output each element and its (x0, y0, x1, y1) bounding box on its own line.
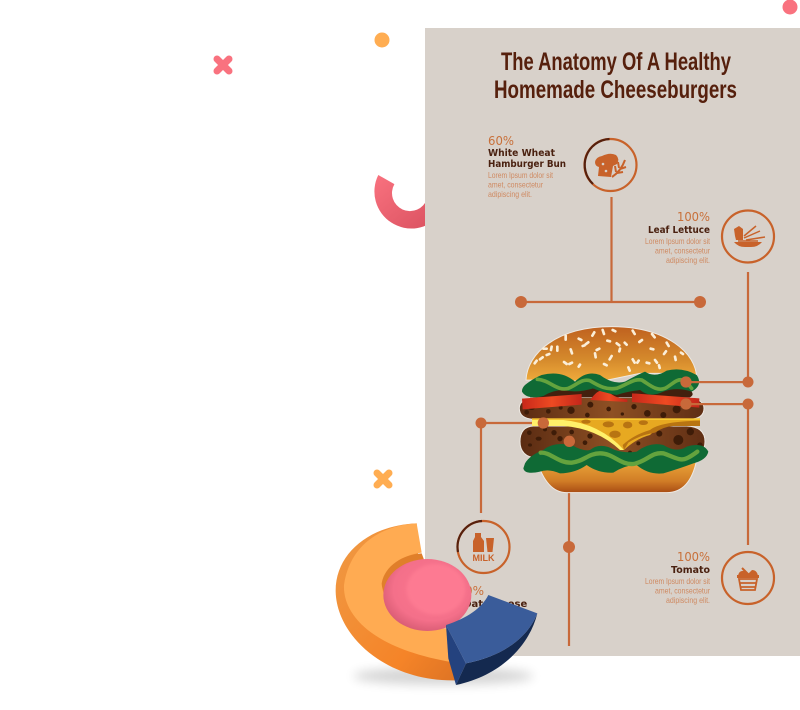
blue bottom side (456, 613, 537, 685)
lower lettuce (523, 444, 708, 474)
text: tomato: amet, consectetur (655, 586, 710, 596)
top bun (526, 327, 697, 382)
lower patty spots (527, 427, 703, 455)
text: tomato: adipiscing elit. (666, 595, 710, 605)
text: leaf lettuce (645, 210, 710, 265)
sesame seeds (535, 330, 683, 371)
blue left side (446, 625, 466, 685)
top dark layer (530, 388, 693, 397)
orange dot decoration (374, 32, 390, 48)
pink ring segment (374, 175, 440, 229)
text: white wheat bun: White Wheat (488, 148, 555, 159)
burger connector dots (538, 376, 748, 447)
icon: basket (722, 552, 774, 604)
orange segment top (344, 523, 459, 663)
orange inner wall (381, 553, 427, 600)
text: white wheat bun: adipiscing elit. (488, 189, 532, 199)
lower patty (520, 426, 705, 458)
blue top (446, 595, 537, 663)
icon: milk (458, 521, 510, 573)
icon: salad bowl (722, 210, 774, 262)
text: white wheat bun: Hamburger Bun (488, 159, 566, 170)
cheese (532, 418, 700, 450)
text: partly hidden ingredient: Oat Cheese (463, 599, 527, 610)
connector lines (476, 197, 754, 646)
icon: milk: MILK (472, 553, 495, 563)
3D donut chart (336, 523, 537, 685)
text: partly hidden ingredient: 60% (457, 584, 484, 598)
text: tomato: 100% (677, 550, 710, 564)
pink dome (383, 559, 471, 631)
upper patty spots (524, 402, 681, 418)
ground shadow (353, 667, 533, 685)
infographic panel (425, 28, 800, 656)
text: white wheat bun: 60% (488, 134, 514, 148)
text: white wheat bun: amet, consectetur (488, 180, 543, 190)
bottom bun (537, 460, 697, 493)
text: partly hidden ingredient (457, 584, 527, 610)
title (494, 48, 737, 104)
text: leaf lettuce: 100% (677, 210, 710, 224)
upper patty (519, 397, 704, 419)
pink dot decoration (782, 0, 798, 14)
text: leaf lettuce: Leaf Lettuce (648, 225, 710, 236)
orange cross decoration (377, 473, 389, 485)
text: leaf lettuce: amet, consectetur (655, 246, 710, 256)
upper lettuce (522, 369, 699, 397)
burger illustration (519, 327, 748, 493)
text: tomato: Lorem Ipsum dolor sit (645, 576, 710, 586)
orange segment side (336, 523, 459, 680)
text: white wheat bun (488, 134, 566, 199)
text: tomato (645, 550, 710, 605)
text: white wheat bun: Lorem Ipsum dolor sit (488, 170, 553, 180)
tomato slices (522, 390, 699, 409)
text: leaf lettuce: adipiscing elit. (666, 255, 710, 265)
text: leaf lettuce: Lorem Ipsum dolor sit (645, 236, 710, 246)
text: tomato: Tomato (671, 565, 710, 576)
icon: bread and wheat (584, 139, 636, 191)
pink cross decoration (217, 59, 229, 71)
